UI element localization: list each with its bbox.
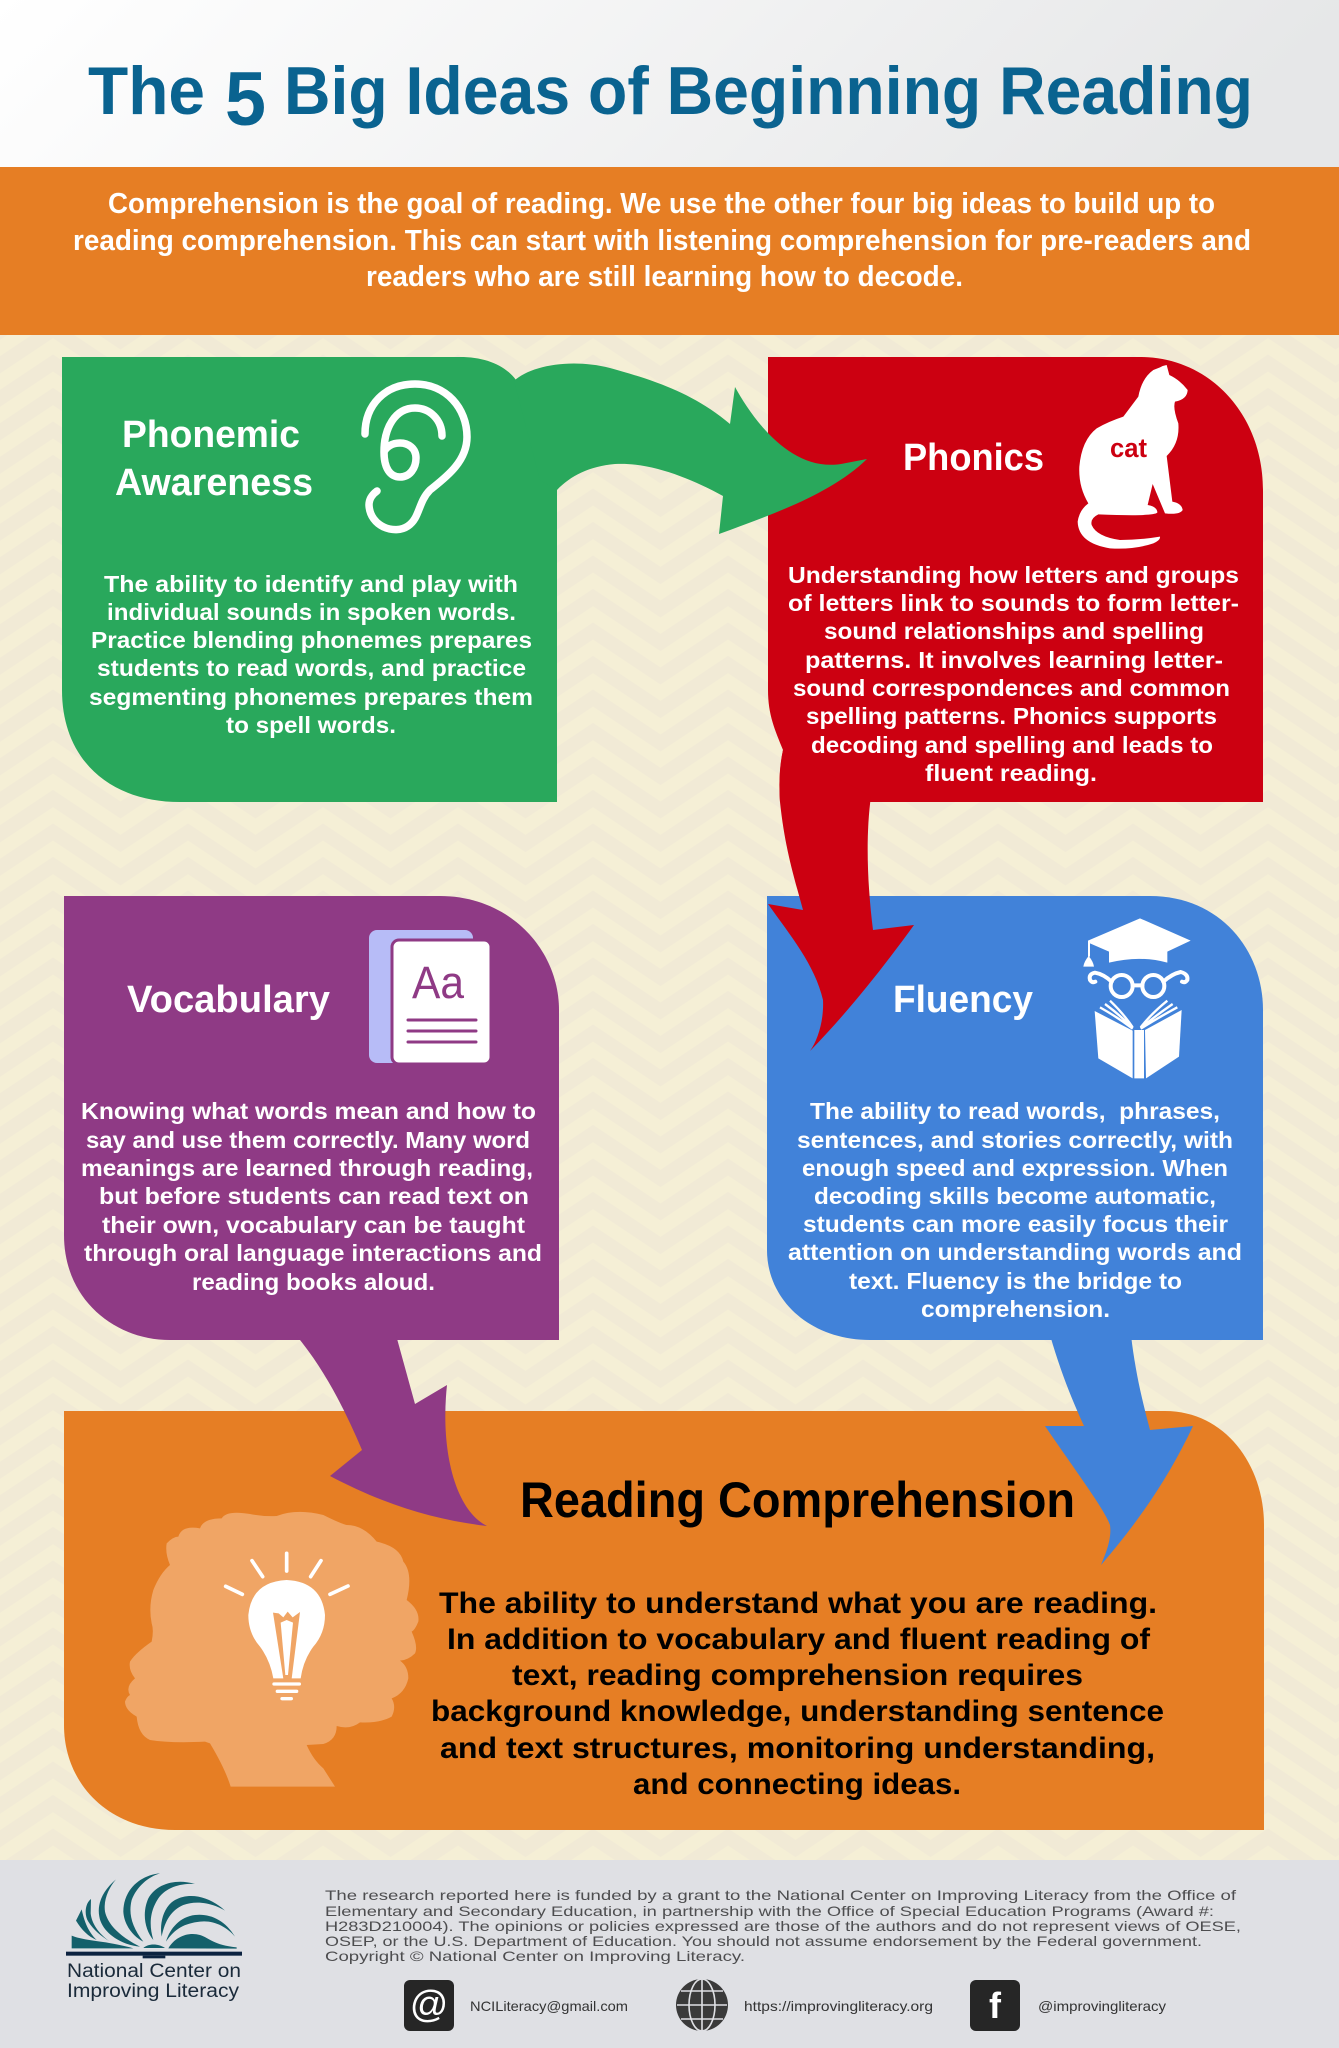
panel: vocabulary	[64, 896, 559, 1526]
panel: fluency	[767, 896, 1263, 1565]
title: The	[88, 53, 205, 129]
body text: reading books aloud.	[192, 1269, 435, 1295]
body text: text. Fluency is the bridge to	[849, 1268, 1182, 1294]
body text	[431, 1587, 1164, 1801]
contact: email: @	[410, 1984, 448, 2026]
body text: of letters link to sounds to form letter-	[788, 590, 1239, 616]
intro banner: reading comprehension. This can start with listening comprehension for pre-readers and	[73, 225, 1251, 257]
body text: students can more easily focus their	[803, 1211, 1228, 1237]
body text	[81, 1098, 542, 1295]
funding disclaimer: Copyright © National Center on Improving Literacy.	[325, 1948, 745, 1964]
body text: comprehension.	[921, 1296, 1110, 1322]
body text: The ability to understand what you are reading.	[439, 1587, 1157, 1620]
funding disclaimer: Elementary and Secondary Education, in partnership with the Office of Special Education Programs (Award #:	[325, 1903, 1214, 1919]
icon: graduation cap, glasses and book	[1083, 918, 1191, 1078]
title: Big Ideas of Beginning Reading	[284, 53, 1253, 129]
funding disclaimer: OSEP, or the U.S. Department of Education. You should not assume endorsement by the Federal government.	[325, 1933, 1202, 1949]
body text: The ability to identify and play with	[104, 571, 518, 597]
panel: phonemic awareness	[62, 357, 867, 802]
arrow: phonemic awareness to phonics	[514, 364, 867, 534]
body text: The ability to read words, phrases,	[810, 1098, 1220, 1124]
heading: phonemic awareness: Awareness	[115, 462, 313, 504]
body text	[788, 1098, 1242, 1322]
header band with title	[0, 0, 1339, 168]
body text: students to read words, and practice	[97, 655, 526, 681]
body text	[89, 571, 533, 738]
heading: phonics: Phonics	[903, 437, 1044, 479]
body text: fluent reading.	[925, 760, 1097, 786]
body text: their own, vocabulary can be taught	[102, 1212, 525, 1238]
intro banner	[0, 167, 1339, 335]
body text: segmenting phonemes prepares them	[89, 684, 533, 710]
icon: Aa page: Aa	[412, 957, 465, 1008]
contact: facebook: @improvingliteracy	[1038, 1998, 1166, 2014]
body text: sound relationships and spelling	[824, 618, 1204, 644]
icon: head with light bulb	[125, 1512, 419, 1787]
logo: National Center on Improving Literacy	[66, 1873, 242, 2002]
title: 5	[225, 57, 266, 142]
funding disclaimer: The research reported here is funded by a grant to the National Center on Improving Literacy from the Office of	[325, 1887, 1236, 1903]
body text: Understanding how letters and groups	[788, 562, 1239, 588]
body text	[788, 562, 1239, 786]
icon: Aa page	[369, 930, 491, 1064]
contact: email	[404, 1980, 628, 2031]
icon: ear	[365, 384, 467, 530]
patterned background	[0, 335, 1339, 1860]
body text: enough speed and expression. When	[802, 1155, 1228, 1181]
body text: individual sounds in spoken words.	[107, 599, 516, 625]
body text: decoding and spelling and leads to	[811, 732, 1213, 758]
heading: phonemic awareness: Phonemic	[122, 414, 300, 456]
logo: National Center on Improving Literacy: Improving Literacy	[67, 1981, 240, 2002]
heading: reading comprehension: Reading Comprehension	[520, 1472, 1075, 1528]
body text: patterns. It involves learning letter-	[805, 647, 1223, 673]
body text: meanings are learned through reading,	[81, 1155, 533, 1181]
body text: sentences, and stories correctly, with	[797, 1127, 1233, 1153]
contact: website: https://improvingliteracy.org	[744, 1998, 933, 2014]
contact: facebook: f	[989, 1985, 1002, 2026]
body text: sound correspondences and common	[793, 675, 1230, 701]
body text: Knowing what words mean and how to	[81, 1098, 536, 1124]
heading: phonemic awareness	[115, 414, 313, 504]
body text: attention on understanding words and	[788, 1239, 1242, 1265]
intro banner: Comprehension is the goal of reading. We use the other four big ideas to build up to	[108, 188, 1215, 220]
body text: text, reading comprehension requires	[512, 1659, 1083, 1692]
heading: fluency: Fluency	[893, 979, 1033, 1021]
body text: to spell words.	[226, 712, 396, 738]
panel: reading comprehension	[64, 1411, 1264, 1830]
contact: email: NCILiteracy@gmail.com	[470, 1998, 628, 2014]
body text: background knowledge, understanding sentence	[431, 1695, 1164, 1728]
intro banner: readers who are still learning how to decode.	[366, 261, 963, 293]
arrow: fluency to comprehension	[1045, 1335, 1193, 1565]
body text: Practice blending phonemes prepares	[91, 627, 532, 653]
footer	[0, 1860, 1339, 2048]
contact: facebook	[970, 1980, 1166, 2031]
body text: decoding skills become automatic,	[814, 1183, 1216, 1209]
body text: In addition to vocabulary and fluent reading of	[447, 1623, 1151, 1656]
icon: cat silhouette: cat	[1110, 433, 1147, 463]
funding disclaimer	[325, 1887, 1241, 1964]
body text: but before students can read text on	[99, 1183, 529, 1209]
body text: and connecting ideas.	[633, 1768, 961, 1801]
body text: and text structures, monitoring understanding,	[440, 1732, 1155, 1765]
logo: National Center on Improving Literacy: National Center on	[67, 1961, 241, 1982]
icon: cat silhouette	[1078, 365, 1188, 549]
heading: vocabulary: Vocabulary	[127, 979, 330, 1021]
arrow: phonics to fluency	[768, 750, 914, 1051]
panel: phonics	[768, 357, 1263, 1051]
body text: spelling patterns. Phonics supports	[806, 703, 1217, 729]
body text: through oral language interactions and	[84, 1240, 542, 1266]
title	[88, 53, 1253, 142]
body text: say and use them correctly. Many word	[86, 1127, 530, 1153]
arrow: vocabulary to comprehension	[296, 1335, 487, 1526]
contact: website	[676, 1979, 933, 2031]
funding disclaimer: H283D210004). The opinions or policies expressed are those of the authors and do not represent views of OESE,	[325, 1918, 1241, 1934]
